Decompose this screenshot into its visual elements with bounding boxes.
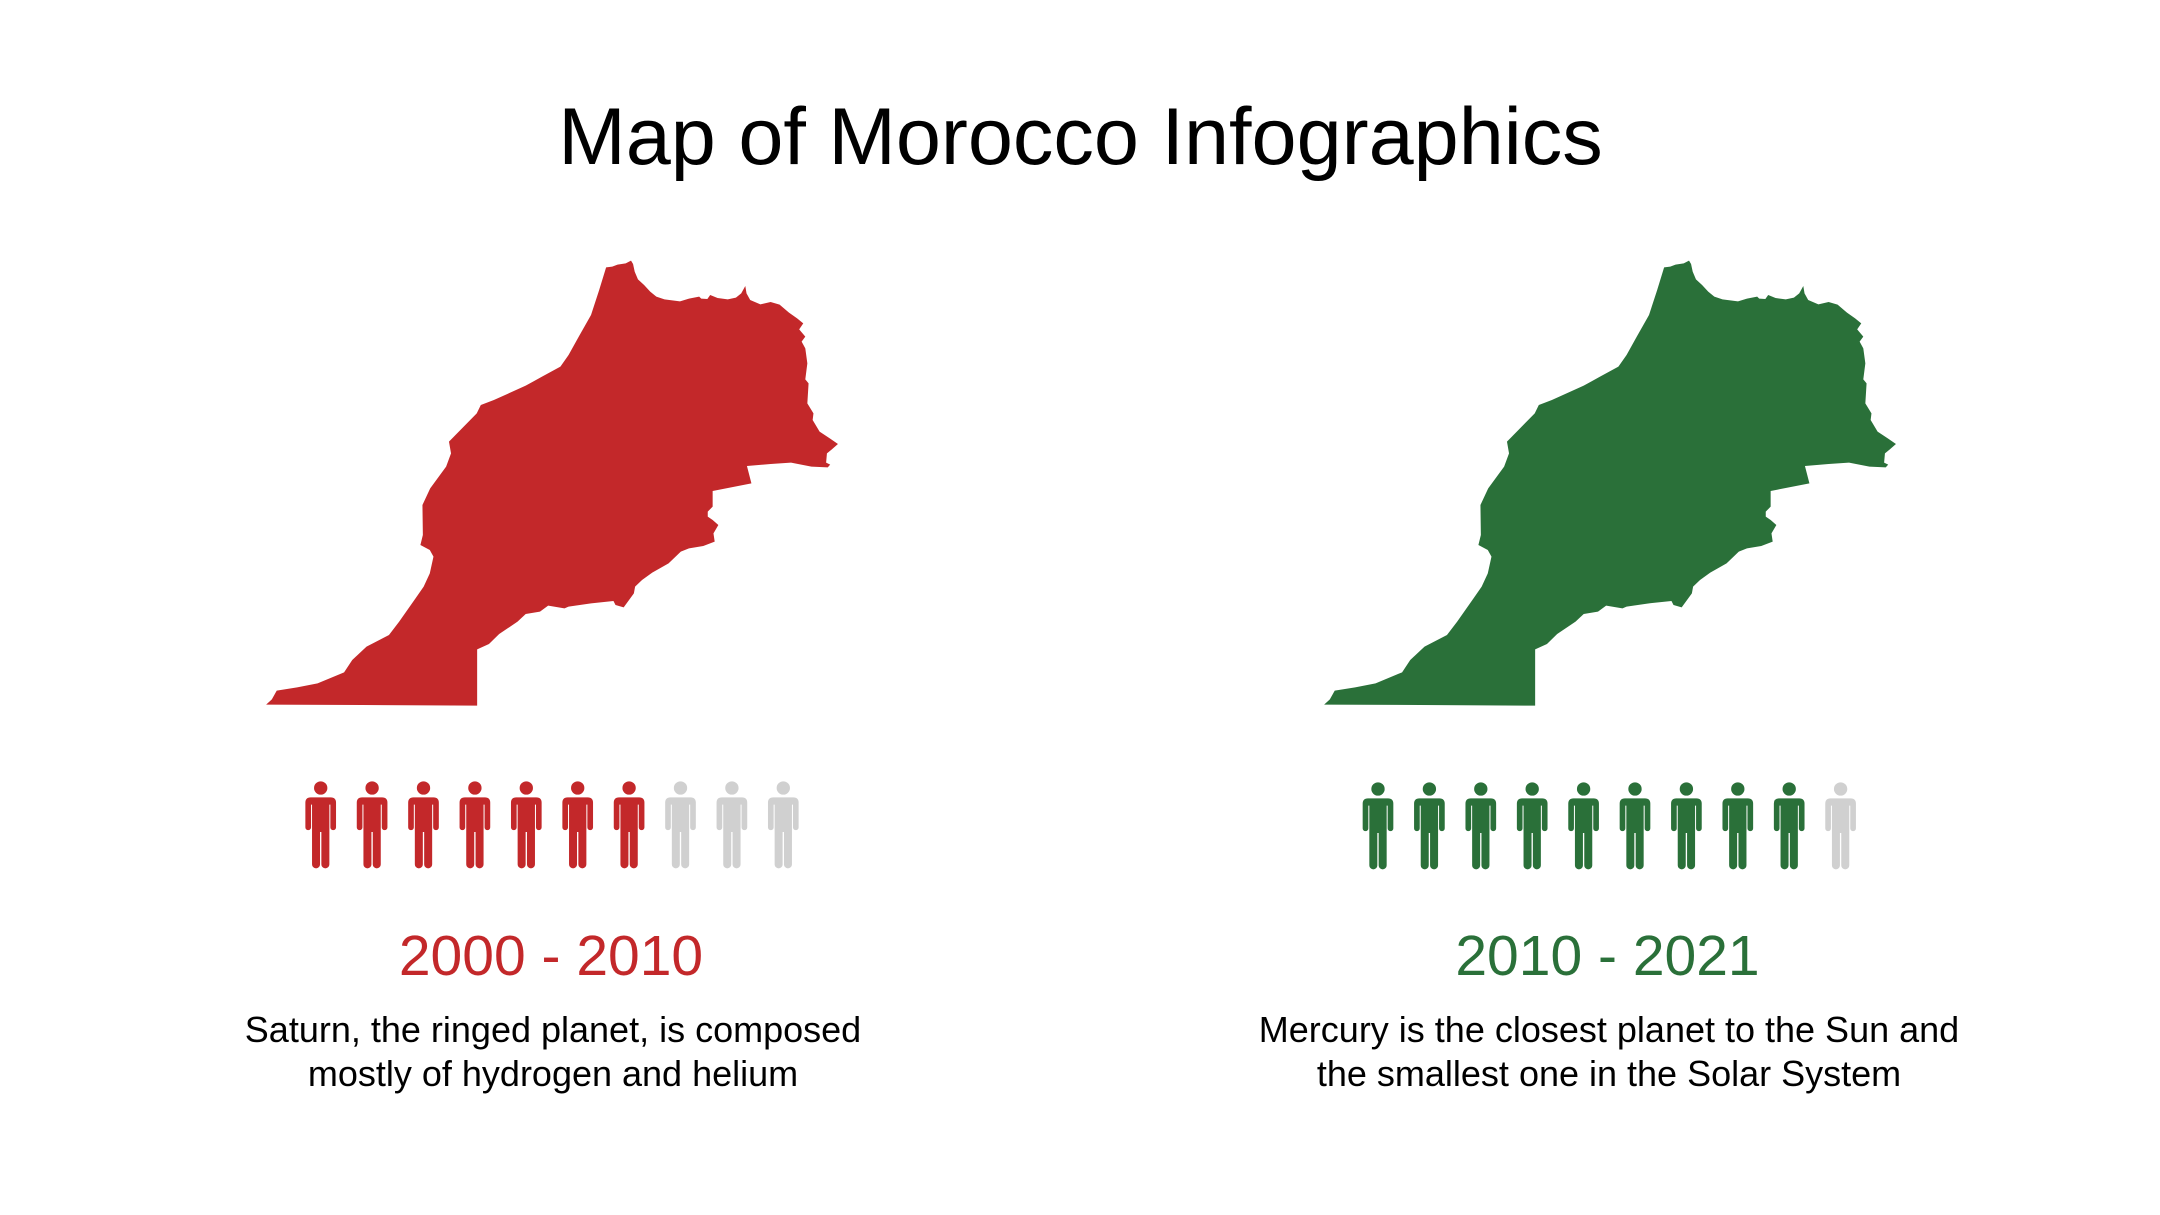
icons: people 7 of 10 xyxy=(305,781,799,868)
heading: 2000 - 2010: 2000 - 2010 xyxy=(399,924,703,988)
panel: 2010 - 2021 xyxy=(1259,261,1959,1094)
panel: 2000 - 2010 xyxy=(245,261,861,1094)
map: Morocco green xyxy=(1324,261,1896,706)
text block: Mercury description: the smallest one in the Solar System xyxy=(1317,1053,1901,1094)
text block: Saturn description: mostly of hydrogen and helium xyxy=(308,1053,798,1094)
text block: Mercury description: Mercury is the closest planet to the Sun and xyxy=(1259,1009,1959,1050)
heading: 2010 - 2021: 2010 - 2021 xyxy=(1455,924,1760,988)
icons: people 9 of 10 xyxy=(1363,782,1856,869)
map: Morocco red xyxy=(266,261,838,706)
title: Map of Morocco Infographics xyxy=(558,92,1603,182)
text block: Saturn description: Saturn, the ringed planet, is composed xyxy=(245,1009,861,1050)
